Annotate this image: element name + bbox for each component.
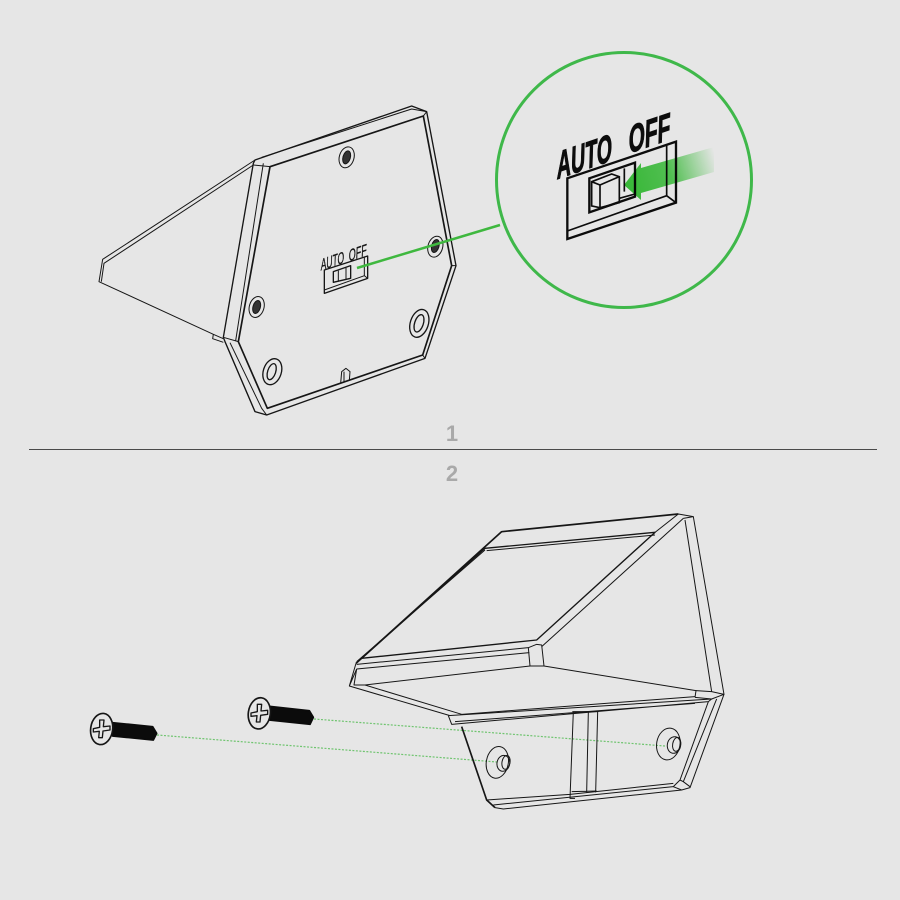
underside edges [462, 727, 682, 809]
divider [29, 448, 877, 450]
right screw hole [654, 726, 683, 762]
right edge [673, 514, 724, 790]
step number 2: 2 [446, 461, 458, 486]
guide line: lower screw [157, 735, 497, 762]
centre rib [570, 712, 598, 798]
small label: AUTO OFF: AUTO [321, 247, 344, 275]
bottom notch [341, 368, 350, 383]
left screw hole [484, 745, 511, 780]
device: back view with switch [99, 106, 456, 415]
zoom circle [496, 52, 752, 308]
small label: AUTO OFF: OFF [349, 240, 367, 265]
solar panel frame [349, 514, 683, 686]
mounting screws [247, 145, 445, 319]
screw: upper [246, 696, 313, 730]
step number 1: 1 [446, 421, 458, 446]
guide line: upper screw [314, 719, 665, 746]
screw: lower left [89, 712, 157, 746]
switch housing [567, 142, 676, 239]
counterbored holes [260, 307, 432, 387]
lower tray [349, 666, 712, 724]
large label: AUTO OFF: AUTO [556, 125, 613, 188]
device side wedge [99, 160, 255, 342]
large label: AUTO OFF: OFF [628, 104, 671, 162]
housing bevel [567, 145, 676, 231]
enlarged switch [556, 104, 676, 239]
device back plate frame [223, 106, 456, 415]
device: front view [349, 514, 724, 809]
screws [89, 696, 313, 746]
green arrow [624, 147, 714, 200]
slider block [592, 168, 635, 208]
small switch [324, 256, 368, 293]
slider slot [589, 163, 635, 212]
leader line to zoom circle [357, 225, 500, 268]
